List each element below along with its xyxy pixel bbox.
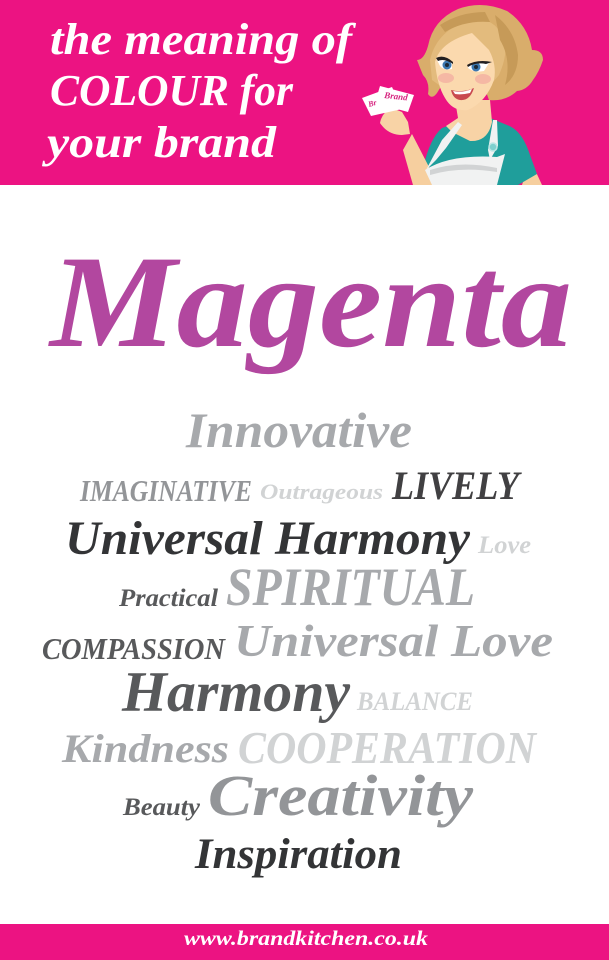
word cloud: Love — [477, 532, 531, 559]
header title: COLOUR for — [50, 66, 294, 115]
header title: your brand — [41, 118, 277, 167]
word cloud: SPIRITUAL — [226, 557, 475, 617]
word cloud: IMAGINATIVE — [79, 473, 252, 508]
footer url: www.brandkitchen.co.uk — [184, 926, 429, 950]
main heading: Magenta: Magenta — [48, 228, 572, 375]
word cloud: Practical — [118, 585, 218, 612]
word cloud: Universal Love — [234, 615, 553, 666]
word cloud: Outrageous — [260, 479, 383, 504]
word cloud: Innovative — [185, 402, 412, 458]
header title — [41, 15, 357, 167]
word cloud: COMPASSION — [42, 631, 226, 666]
word cloud: Kindness — [61, 726, 229, 771]
word cloud: Inspiration — [194, 831, 402, 878]
word cloud: COOPERATION — [238, 722, 538, 773]
header banner — [0, 0, 609, 185]
icon: business cards: Br — [366, 98, 379, 109]
word cloud — [42, 402, 553, 878]
word cloud: Harmony — [121, 661, 351, 724]
footer banner — [0, 924, 609, 960]
icon: business cards: Brand — [383, 90, 409, 102]
word cloud: LIVELY — [391, 463, 522, 508]
icon: business cards — [362, 86, 414, 116]
word cloud: Creativity — [208, 763, 473, 828]
word cloud: BALANCE — [356, 687, 473, 716]
word cloud: Beauty — [122, 794, 201, 821]
word cloud: Universal Harmony — [65, 512, 471, 565]
header title: the meaning of — [50, 15, 357, 64]
illustration: woman holding business cards — [362, 5, 543, 185]
